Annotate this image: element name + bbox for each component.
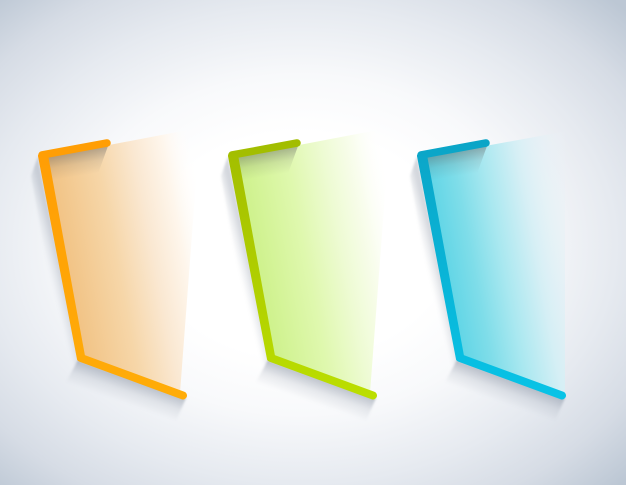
green bracket xyxy=(230,143,373,396)
green panel fill xyxy=(236,128,390,393)
blue left and bottom shadow xyxy=(410,156,565,421)
blue bracket xyxy=(419,143,562,396)
orange panel fill xyxy=(46,128,200,393)
orange left and bottom shadow xyxy=(31,156,186,421)
panel: orange xyxy=(31,128,200,421)
blue inner top shadow xyxy=(426,146,487,190)
orange inner top shadow xyxy=(47,146,108,190)
orange bracket xyxy=(40,143,183,396)
panel: blue xyxy=(410,131,565,421)
green inner top shadow xyxy=(237,146,298,190)
panel: green xyxy=(221,128,390,421)
green left and bottom shadow xyxy=(221,156,376,421)
blue panel fill xyxy=(425,131,565,393)
